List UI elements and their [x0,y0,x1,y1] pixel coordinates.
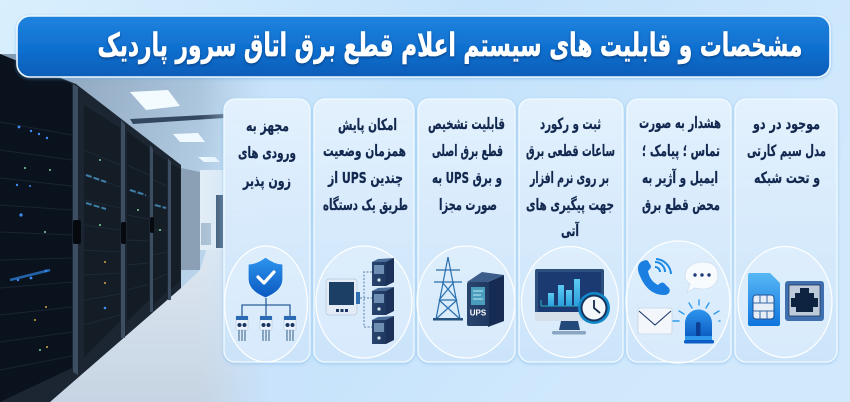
text: alert channels [639,114,721,214]
text: multi UPS monitoring: همزمان وضعیت [323,142,406,160]
panel: alert channels [626,99,731,363]
text: software logging [526,115,615,240]
text: multi UPS monitoring: چندین UPS از [327,169,403,188]
text: multi UPS monitoring: طریق یک دستگاه [323,195,408,214]
text: multi UPS monitoring [323,116,408,214]
text: remote detection: صورت مجزا [439,196,497,214]
icon: power tower and UPS [417,246,515,358]
icon: phone, chat, mail and siren [626,241,730,363]
panel: zone inputs [224,99,310,362]
text: software logging: ساعات قطعی برق [526,142,615,160]
text: remote detection: و برق UPS به [432,169,502,187]
text: remote detection: قطع برق اصلی [432,142,503,160]
icon: monitor with chart and clock [522,246,618,358]
panel: software logging [519,99,623,362]
text: software logging: ثبت و رکورد [540,115,601,133]
text: zone inputs: مجهز به [246,117,289,135]
text: software logging: آتی [561,221,579,240]
text: zone inputs [238,117,296,191]
panel: SIM and network models [735,99,837,362]
text: alert channels: تماس ؛ پیامک ؛ [642,142,720,161]
text: zone inputs: ورودی های [238,144,296,162]
icon: power tower and UPS: UPS [470,308,487,318]
text: alert channels: ایمیل و آژیر به [642,168,718,187]
text: remote detection: قابلیت تشخیص [428,115,505,133]
text: SIM and network models: و تحت شبکه [754,169,820,187]
text: zone inputs: زون پذیر [242,172,291,191]
text: multi UPS monitoring: امکان پایش [338,116,397,135]
text: software logging: بر روی نرم افزار [529,169,609,187]
text: alert channels: هشدار به صورت [639,114,721,132]
text: software logging: جهت پیگیری های [526,195,614,215]
panel: multi UPS monitoring [314,99,414,362]
title banner [17,16,830,77]
text: remote detection [428,115,505,214]
text: SIM and network models: موجود در دو [752,115,820,133]
panel: remote detection [417,99,515,362]
icon: monitor and servers [316,246,412,358]
server room photo [0,54,310,402]
text: alert channels: محض قطع برق [642,196,720,214]
text: SIM and network models [747,115,826,187]
icon: SIM card and network port [738,246,832,358]
icon: shield with zone inputs [224,246,308,362]
